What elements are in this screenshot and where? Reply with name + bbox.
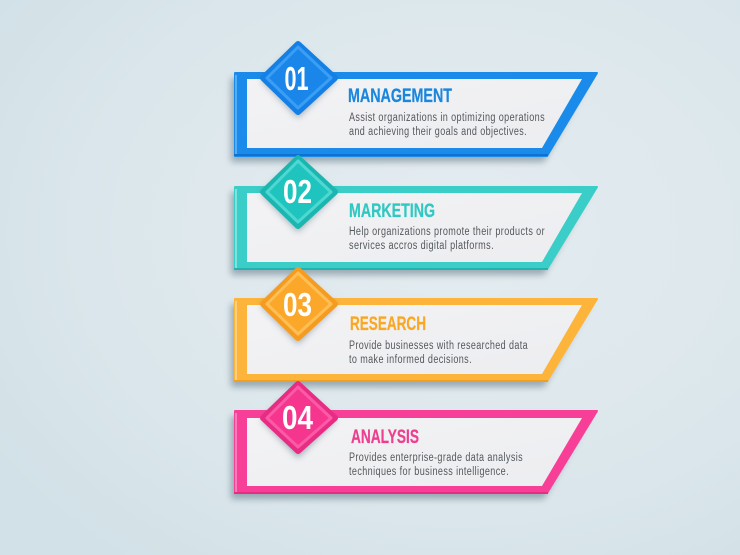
- heading: marketing: MARKETING: [349, 200, 435, 222]
- icon: diamond 04: [261, 384, 336, 458]
- text: research description: to make informed decisions.: [349, 354, 472, 366]
- text: management description: and achieving their goals and objectives.: [349, 126, 527, 138]
- number 02: 02: [283, 173, 312, 210]
- number 03: 03: [283, 286, 312, 323]
- text: marketing description: Help organizations promote their products or: [349, 226, 545, 238]
- panel: 03 research: [231, 270, 597, 387]
- heading: management: MANAGEMENT: [348, 85, 452, 107]
- heading: research: RESEARCH: [350, 313, 426, 335]
- icon: diamond 02: [261, 158, 336, 232]
- number 01: 01: [284, 60, 308, 97]
- text: analysis description: techniques for business intelligence.: [349, 466, 509, 478]
- text: analysis description: Provides enterprise-grade data analysis: [349, 452, 523, 464]
- heading: analysis: ANALYSIS: [351, 426, 419, 448]
- panel: 01 management: [231, 44, 597, 162]
- icon: diamond 01: [261, 44, 336, 118]
- text: management description: Assist organizations in optimizing operations: [349, 112, 545, 124]
- text: research description: Provide businesses with researched data: [349, 340, 528, 352]
- number 04: 04: [282, 399, 314, 436]
- panel: 02 marketing: [231, 158, 597, 275]
- text: marketing description: services accros digital platforms.: [349, 240, 494, 252]
- icon: diamond 03: [261, 270, 336, 344]
- panel: 04 analysis: [231, 384, 597, 499]
